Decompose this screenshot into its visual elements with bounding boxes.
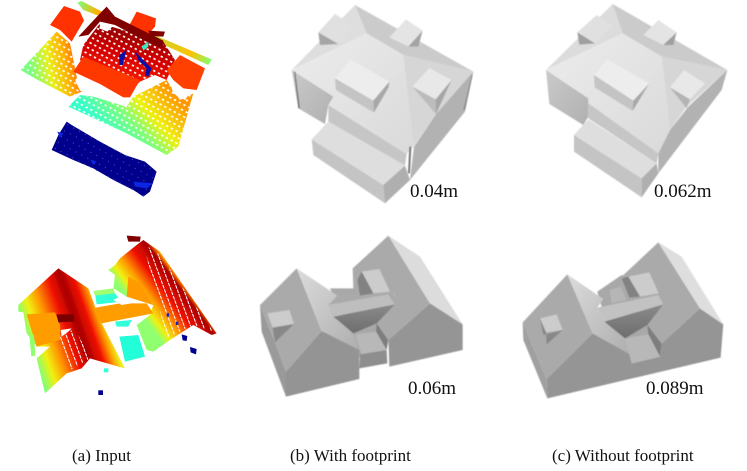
caption: (a) Input: (a) Input — [72, 446, 131, 465]
icon: dormer left — [540, 314, 563, 344]
icon: dormer centre — [335, 59, 389, 113]
icon: dormer left — [267, 310, 294, 342]
caption: (c) Without footprint: (c) Without footprint — [552, 446, 694, 465]
panel: input point cloud, top ground points — [52, 122, 157, 197]
panel: with footprint, bottom house — [260, 236, 463, 397]
icon: dormer back left — [318, 14, 354, 45]
panel: without footprint, bottom house — [523, 242, 723, 398]
label: 0.04m: 0.04m — [410, 181, 458, 202]
label: 0.06m: 0.06m — [408, 378, 456, 399]
icon: dormer right — [622, 272, 659, 298]
icon: dormer back left — [577, 15, 613, 45]
panel: input point cloud, top — [21, 1, 212, 155]
icon: dormer right — [412, 68, 452, 114]
panel: input point cloud, bottom — [18, 236, 217, 395]
icon: dormer centre — [594, 59, 649, 111]
label: 0.062m: 0.062m — [654, 181, 712, 202]
caption: (b) With footprint: (b) With footprint — [290, 446, 411, 465]
panel: with footprint, top house — [292, 5, 473, 203]
icon: dormer right — [670, 70, 705, 108]
icon: dormer back right — [643, 20, 677, 45]
label: 0.089m: 0.089m — [646, 378, 704, 399]
panel: without footprint, top house — [546, 4, 727, 197]
icon: dormer right — [357, 269, 390, 296]
icon: dormer back right — [389, 19, 423, 47]
